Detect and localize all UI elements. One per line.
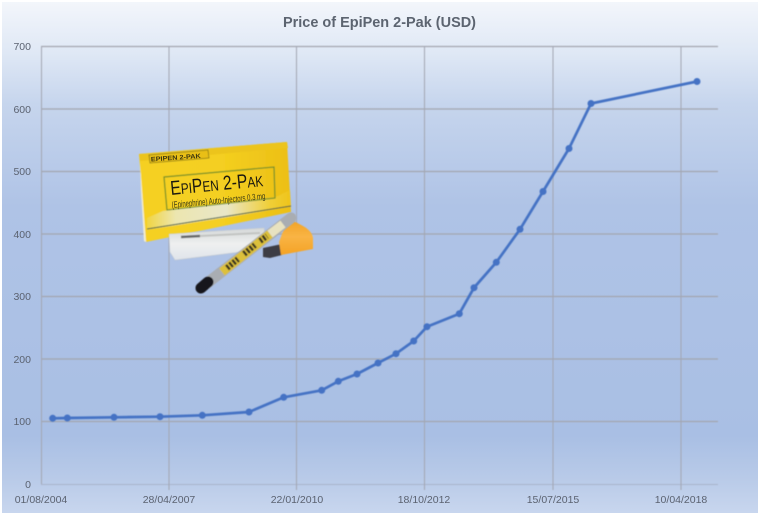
box subtitle: (Epinephrine) Auto-Injectors 0.3 mg: [171, 191, 266, 210]
y axis labels: 700: [13, 41, 31, 53]
box flap label: EPIPEN 2-PAK: [151, 153, 201, 163]
x axis labels: 01/08/2004: [15, 494, 67, 506]
x axis labels: 22/01/2010: [271, 494, 323, 506]
price line series: [49, 78, 700, 422]
y axis labels: 500: [13, 166, 31, 178]
x axis labels: 18/10/2012: [398, 494, 450, 506]
y axis labels: [13, 41, 31, 491]
auto-injector pen: [201, 218, 291, 288]
orange safety cap: [263, 218, 313, 258]
clear trainer tube: [169, 228, 266, 260]
y axis labels: 100: [13, 416, 31, 428]
product photo: EpiPen 2-Pak box and injectors: [139, 142, 313, 288]
grid lines: [41, 46, 718, 490]
y axis labels: 300: [13, 291, 31, 303]
title: Price of EpiPen 2-Pak (USD): [283, 14, 476, 31]
y axis labels: 200: [13, 354, 31, 366]
x axis labels: [15, 494, 707, 506]
box wordmark: EPIPEN 2-PAK: [169, 169, 264, 200]
y axis labels: 600: [13, 104, 31, 116]
box: [139, 142, 291, 242]
y axis labels: 0: [25, 479, 31, 491]
y axis labels: 400: [13, 229, 31, 241]
x axis labels: 15/07/2015: [527, 494, 579, 506]
x axis labels: 28/04/2007: [143, 494, 195, 506]
x axis labels: 10/04/2018: [655, 494, 707, 506]
